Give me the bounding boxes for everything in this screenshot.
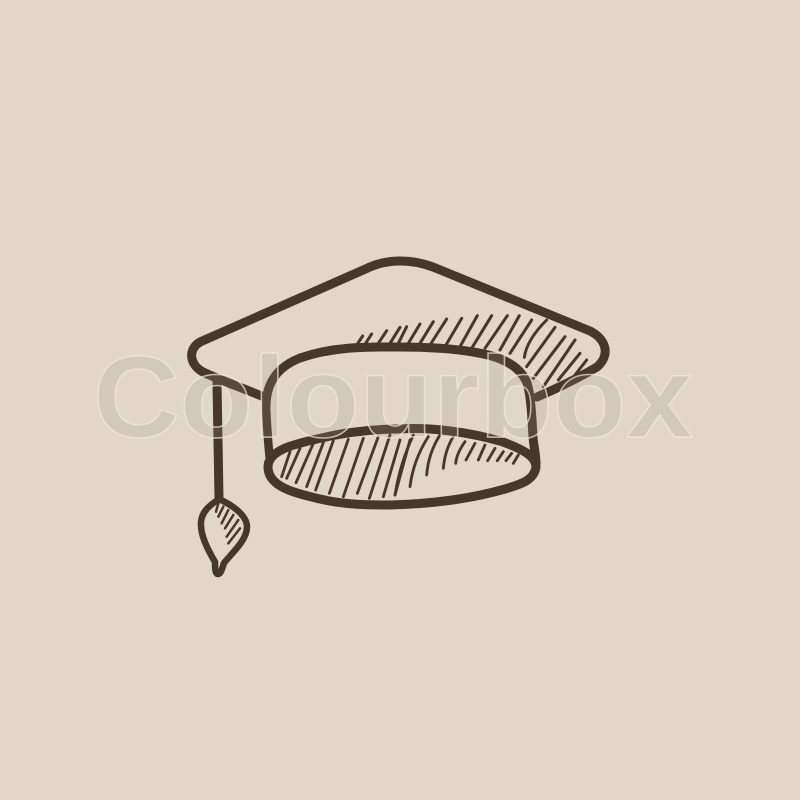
hatching: crown interior (282, 435, 518, 498)
icon: graduation cap (192, 261, 605, 574)
tassel (201, 499, 247, 574)
crown upper band (266, 347, 536, 464)
tassel cord (217, 383, 219, 498)
crown bottom ellipse (268, 429, 536, 505)
hatching: cap underside (357, 316, 587, 387)
watermark: Colourbox: Colourbox (93, 332, 693, 462)
cap board outline (192, 261, 605, 397)
crown left side (266, 407, 270, 460)
hatching: tassel (216, 503, 240, 543)
